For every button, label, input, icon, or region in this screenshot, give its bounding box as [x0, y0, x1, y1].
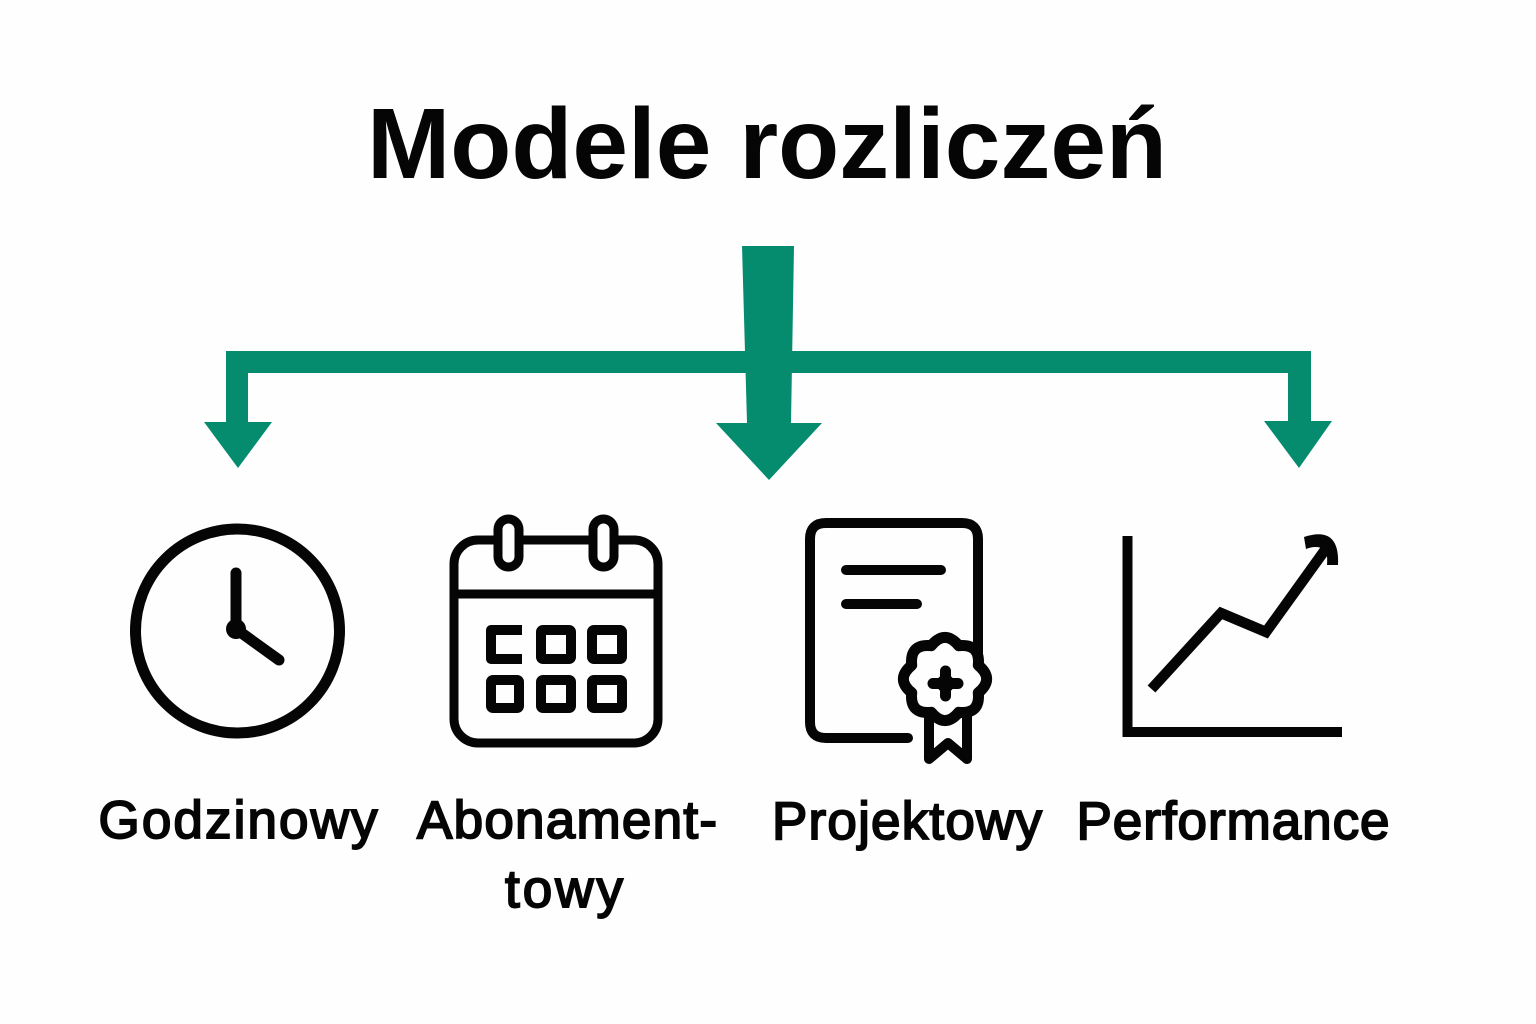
- title: Modele rozliczeń: [367, 88, 1167, 200]
- label: Abonamentowy: towy: [505, 860, 624, 919]
- arrow: central: [716, 246, 822, 480]
- label: Abonamentowy: Abonament-: [417, 791, 717, 850]
- label: Abonamentowy: [417, 791, 717, 919]
- icon: calendar: [454, 519, 658, 743]
- icon: contract with rosette: [810, 523, 987, 759]
- label: Godzinowy: Godzinowy: [98, 791, 378, 850]
- label: Performance: Performance: [1076, 792, 1390, 851]
- label: Projektowy: Projektowy: [772, 792, 1042, 851]
- icon: growth chart: [1128, 534, 1342, 732]
- arrows: branching connector: [204, 246, 1332, 480]
- icon: clock: [136, 529, 340, 733]
- arrow: left and right branches: [204, 351, 1332, 468]
